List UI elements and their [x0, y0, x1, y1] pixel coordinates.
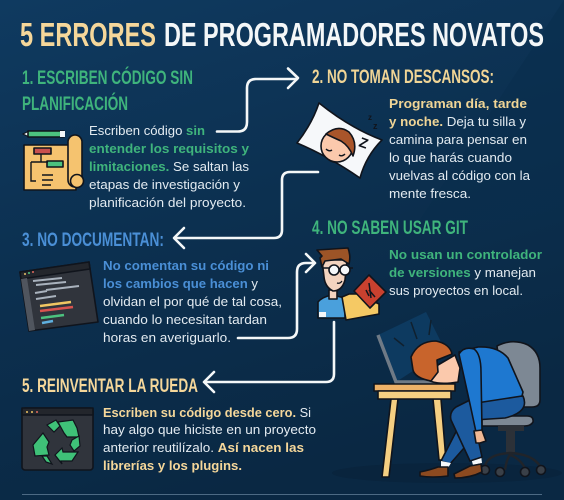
text: error 2: mente fresca.: [389, 186, 471, 201]
panel: error 3: [20, 230, 282, 345]
title: 5 ERRORES: [20, 16, 156, 53]
text: error 3: No comentan su código ni: [103, 258, 269, 273]
heading: error 2: 2. NO TOMAN DESCANSOS:: [312, 67, 494, 88]
title: [20, 16, 544, 53]
heading: error 3: 3. NO DOCUMENTAN:: [22, 230, 164, 251]
text: error 2: vuelvas al código con la: [389, 168, 531, 183]
icon: recycling window: [22, 408, 93, 470]
arrow: 3 to 4: [238, 254, 315, 338]
text: error 5: [103, 405, 316, 473]
icon: developer with git folder: [317, 248, 386, 320]
text: error 3: cuando lo necesitan tardan: [103, 312, 267, 327]
laptop: [378, 312, 445, 382]
heading: error 1: [22, 67, 193, 115]
icon: sleeping on pillow: [297, 103, 382, 178]
text: error 1: Escriben código sin: [89, 123, 205, 138]
text: error 2: camina para pensar en: [389, 132, 527, 147]
text: error 5: anterior reutilízalo. Así nacen las: [103, 440, 304, 455]
text: error 2: y noche. Deja tu silla y: [389, 114, 527, 129]
desk: [374, 384, 455, 477]
text: error 3: los cambios que hacen y: [103, 276, 258, 291]
icon: sleeping on pillow: z: [368, 113, 372, 122]
panel: error 4: [312, 218, 542, 320]
text: error 2: lo que harás cuando: [389, 150, 512, 165]
heading: error 5: 5. REINVENTAR LA RUEDA: [22, 376, 198, 397]
text: error 4: sus proyectos en local.: [389, 283, 523, 298]
text: error 3: [103, 258, 282, 345]
chair: [480, 342, 546, 476]
heading: error 1: PLANIFICACIÓN: [22, 93, 128, 115]
text: error 1: etapas de investigación y: [89, 177, 241, 192]
text: error 1: entender los requisitos y: [89, 141, 250, 156]
icon: sleeping on pillow: Z: [357, 134, 371, 152]
text: error 1: [89, 123, 250, 210]
panel: error 5: [22, 376, 316, 473]
icon: blueprint and pencil: [23, 131, 84, 190]
text: error 1: planificación del proyecto.: [89, 195, 246, 210]
panel: error 2: [297, 67, 531, 201]
person: [411, 341, 525, 478]
text: error 1: limitaciones. Se saltan las: [89, 159, 250, 174]
text: error 5: hay algo que hiciste en un proyecto: [103, 422, 316, 437]
text: error 3: olvidan el por qué de tal cosa,: [103, 294, 282, 309]
text: error 4: [389, 247, 542, 298]
text: error 4: No usan un controlador: [389, 247, 542, 262]
heading: error 4: 4. NO SABEN USAR GIT: [312, 218, 468, 239]
text: error 2: Programan día, tarde: [389, 96, 527, 111]
text: error 5: Escriben su código desde cero. Si: [103, 405, 311, 420]
icon: sleeping on pillow: z: [373, 121, 378, 131]
text: error 3: horas en averiguarlo.: [103, 330, 231, 345]
icon: code window: [20, 262, 98, 331]
text: error 2: [389, 96, 531, 201]
heading: error 1: 1. ESCRIBEN CÓDIGO SIN: [22, 67, 193, 89]
arrow: 2 to 3: [174, 172, 318, 248]
panel: error 1: [22, 67, 250, 210]
arrow: 4 to 5: [204, 322, 334, 392]
arrow: 1 to 2: [217, 68, 298, 132]
text: error 4: de versiones y manejan: [389, 265, 536, 280]
text: error 5: librerías y los plugins.: [103, 458, 242, 473]
illustration: exhausted programmer at desk: [374, 312, 546, 478]
